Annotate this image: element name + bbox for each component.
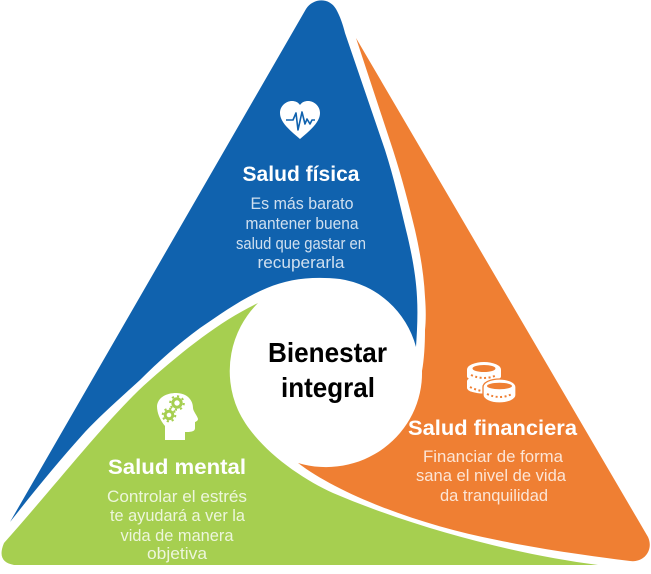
text block: salud física description: [236, 195, 366, 272]
text block: salud financiera description: [416, 448, 567, 505]
text block: salud mental description: [107, 488, 247, 563]
panel: salud mental: [2, 303, 598, 565]
text block: salud financiera description: sana el nivel de vida: [416, 467, 567, 485]
center title: bienestar integral: [268, 337, 387, 403]
panel: salud física: [10, 0, 417, 522]
text block: salud mental description: Controlar el estrés: [107, 488, 247, 506]
text block: salud mental description: vida de manera: [120, 527, 234, 545]
heading: salud mental: Salud mental: [108, 455, 246, 479]
text block: salud física description: Es más barato: [250, 195, 354, 213]
text block: salud física description: salud que gastar en: [236, 235, 366, 253]
icon: heart with pulse: [280, 101, 320, 139]
icon: head with gears: [157, 393, 198, 440]
text block: salud financiera description: Financiar de forma: [423, 448, 564, 466]
center title: bienestar integral: integral: [281, 372, 375, 403]
text block: salud física description: mantener buena: [246, 215, 359, 233]
center title: bienestar integral: Bienestar: [268, 337, 387, 368]
text block: salud física description: recuperarla: [258, 254, 345, 272]
icon: stacked coins: [467, 362, 516, 403]
text block: salud mental description: objetiva: [147, 545, 208, 563]
panel: salud financiera: [298, 38, 650, 561]
heading: salud financiera: Salud financiera: [408, 416, 578, 440]
text block: salud mental description: te ayudará a ver la: [110, 507, 246, 525]
heading: salud física: Salud física: [242, 162, 361, 186]
text block: salud financiera description: da tranquilidad: [440, 487, 548, 505]
